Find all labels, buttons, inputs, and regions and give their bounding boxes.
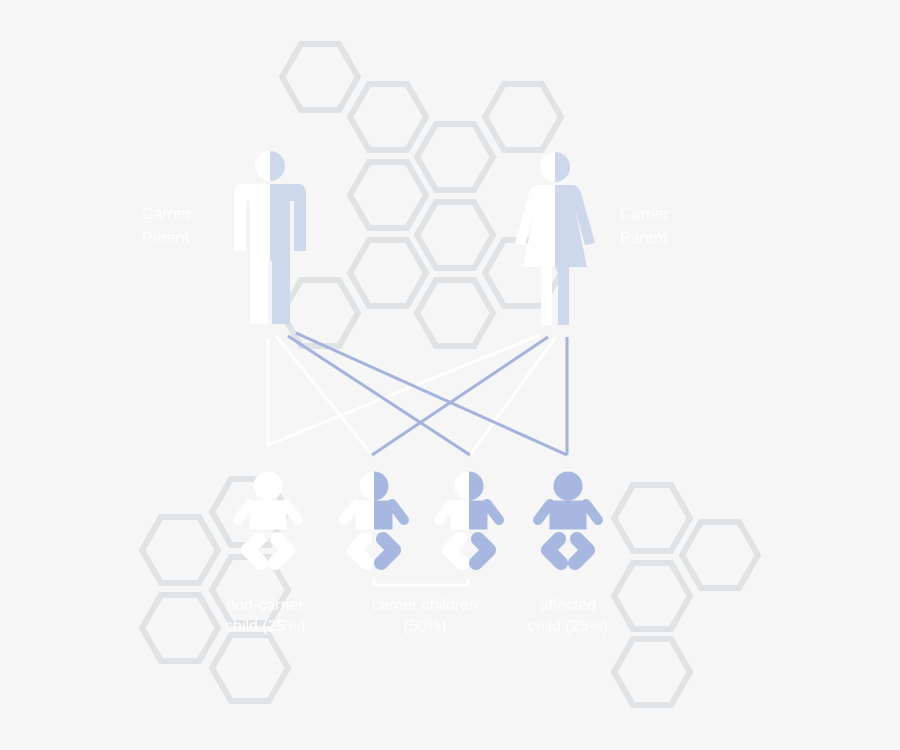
baby: affected bbox=[538, 472, 598, 563]
caption: non-carrier: child (25%) bbox=[225, 618, 305, 635]
baby: carrier 1 bbox=[344, 472, 404, 563]
caption: carrier: (50%) bbox=[404, 618, 446, 635]
caption: non-carrier: non-carrier bbox=[226, 597, 304, 614]
label: father: Parent bbox=[142, 230, 190, 247]
label: mother: Carrier bbox=[620, 206, 669, 223]
caption: affected: child (25%) bbox=[528, 618, 608, 635]
label: father: Carrier bbox=[142, 206, 191, 223]
baby: carrier 2 bbox=[439, 472, 499, 563]
bracket bbox=[374, 578, 468, 585]
label: mother: Parent bbox=[620, 230, 668, 247]
inheritance lines bbox=[268, 333, 567, 455]
father figure bbox=[234, 151, 306, 324]
caption: affected: affected bbox=[540, 597, 596, 614]
background hexagons bbox=[142, 44, 758, 705]
mother figure bbox=[515, 152, 595, 325]
baby: non-carrier bbox=[238, 472, 298, 563]
caption: carrier: carrier children bbox=[372, 597, 478, 614]
